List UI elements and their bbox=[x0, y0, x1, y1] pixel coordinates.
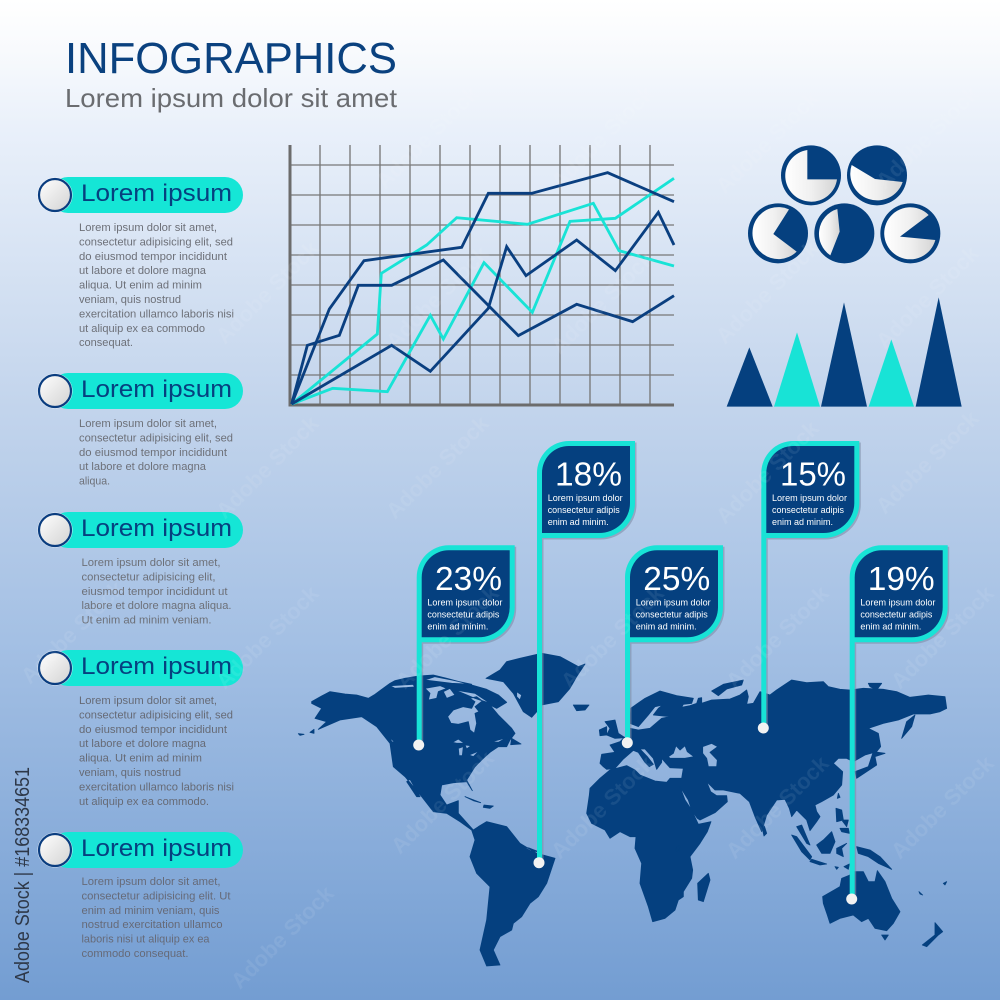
line chart bbox=[290, 145, 674, 405]
flag: 23%: 23% bbox=[435, 560, 502, 597]
watermarks: Adobe Stock bbox=[556, 580, 669, 694]
text block 2: consectetur adipisicing elit, sed bbox=[79, 432, 233, 444]
flag: 15%: 15% bbox=[780, 456, 846, 493]
text block 1: Lorem ipsum dolor sit amet, bbox=[79, 222, 217, 234]
text block 3: consectetur adipisicing elit, bbox=[82, 571, 216, 583]
watermarks: Adobe Stock bbox=[546, 750, 659, 864]
watermarks: Adobe Stock bbox=[226, 880, 339, 994]
text block 5: commodo consequat. bbox=[82, 948, 188, 960]
islands bbox=[298, 705, 589, 808]
text block 5: laboris nisi ut aliquip ex ea bbox=[82, 934, 210, 946]
text block 2: do eiusmod tempor incididunt bbox=[79, 447, 228, 459]
text block 3: labore et dolore magna aliqua. bbox=[82, 600, 232, 612]
world map bbox=[298, 653, 947, 966]
triangle chart bbox=[727, 297, 962, 407]
item 4 bbox=[38, 650, 243, 808]
text block 4: exercitation ullamco laboris nisi bbox=[79, 781, 234, 793]
pie 4 bbox=[814, 203, 874, 263]
text block 1: consectetur adipisicing elit, sed bbox=[79, 236, 233, 248]
watermarks: Adobe Stock bbox=[871, 240, 984, 354]
item 2 bbox=[38, 373, 243, 488]
watermarks: Adobe Stock bbox=[721, 750, 834, 864]
flag: 15%: enim ad minim. bbox=[772, 517, 833, 528]
text block 5: nostrud exercitation ullamco bbox=[82, 919, 222, 931]
watermarks: Adobe Stock bbox=[711, 415, 824, 529]
text block 4: consectetur adipisicing elit, sed bbox=[79, 709, 233, 721]
watermarks: Adobe Stock bbox=[16, 575, 129, 689]
afro-eurasia and oceania bbox=[587, 680, 947, 947]
flag: 18%: 18% bbox=[555, 456, 622, 493]
pill heading 2: Lorem ipsum bbox=[81, 376, 232, 403]
text block 3 bbox=[82, 557, 232, 627]
pie 1 bbox=[781, 145, 841, 205]
text block 3: eiusmod tempor incididunt ut bbox=[82, 586, 228, 598]
flag: 25%: 25% bbox=[643, 560, 710, 597]
flag: 23%: enim ad minim. bbox=[427, 621, 488, 632]
pill heading 4 bbox=[38, 650, 243, 686]
flag: 23%: consectetur adipis bbox=[427, 609, 500, 620]
watermarks: Adobe Stock bbox=[386, 745, 499, 859]
flag: 25%: consectetur adipis bbox=[636, 609, 708, 620]
flag: 15%: consectetur adipis bbox=[772, 505, 844, 516]
text block 1 bbox=[79, 222, 234, 349]
text block 4: veniam, quis nostrud bbox=[79, 767, 181, 779]
british isles bbox=[599, 720, 625, 738]
text block 1: exercitation ullamco laboris nisi bbox=[79, 308, 234, 320]
pie 3 bbox=[748, 203, 808, 263]
text block 4 bbox=[79, 695, 234, 808]
greenland bbox=[486, 653, 585, 717]
text block 5 bbox=[82, 876, 231, 960]
watermarks: Adobe Stock bbox=[211, 580, 324, 694]
text block 1: veniam, quis nostrud bbox=[79, 294, 181, 306]
stock id caption: Adobe Stock | #168334651 bbox=[12, 767, 34, 983]
pill heading 1: Lorem ipsum bbox=[81, 180, 232, 207]
pill heading 2 bbox=[38, 373, 243, 409]
item 3 bbox=[38, 512, 243, 627]
watermarks: Adobe Stock bbox=[211, 410, 324, 524]
tasmania and new zealand bbox=[882, 882, 947, 947]
flag: 18%: Lorem ipsum dolor bbox=[548, 493, 623, 504]
watermarks: Adobe Stock bbox=[391, 580, 504, 694]
text block 1: ut labore et dolore magna bbox=[79, 265, 207, 277]
flag: 23%: Lorem ipsum dolor bbox=[427, 597, 502, 608]
watermarks: Adobe Stock bbox=[871, 80, 984, 194]
pill heading 5: Lorem ipsum bbox=[81, 835, 232, 862]
text block 2: ut labore et dolore magna bbox=[79, 461, 207, 473]
flag: 18%: enim ad minim. bbox=[548, 517, 609, 528]
text block 3: Ut enim ad minim veniam. bbox=[82, 615, 212, 627]
watermarks: Adobe Stock bbox=[721, 580, 834, 694]
flag: 18%: consectetur adipis bbox=[548, 505, 620, 516]
afro-eurasia bbox=[587, 680, 947, 922]
watermarks: Adobe Stock bbox=[211, 235, 324, 349]
text block 4: Lorem ipsum dolor sit amet, bbox=[79, 695, 217, 707]
asia-pacific islands bbox=[676, 680, 915, 902]
location flags bbox=[413, 441, 949, 904]
text block 1: consequat. bbox=[79, 337, 133, 349]
subtitle: Lorem ipsum dolor sit amet bbox=[65, 83, 398, 113]
pie charts bbox=[748, 145, 940, 263]
watermarks: Adobe Stock bbox=[886, 750, 999, 864]
watermarks: Adobe Stock bbox=[546, 245, 659, 359]
watermarks: Adobe Stock bbox=[711, 235, 824, 349]
watermarks: Adobe Stock bbox=[711, 85, 824, 199]
flag: 25% bbox=[622, 545, 724, 748]
flag: 23% bbox=[413, 545, 516, 750]
text block 1: do eiusmod tempor incididunt bbox=[79, 251, 228, 263]
title block bbox=[65, 34, 398, 113]
pill heading 1 bbox=[38, 177, 243, 213]
title: INFOGRAPHICS bbox=[65, 34, 397, 83]
flag: 25%: Lorem ipsum dolor bbox=[636, 597, 711, 608]
text block 3: Lorem ipsum dolor sit amet, bbox=[82, 557, 220, 569]
flag: 19%: consectetur adipis bbox=[860, 609, 933, 620]
text block 2: Lorem ipsum dolor sit amet, bbox=[79, 418, 217, 430]
flag: 19%: enim ad minim. bbox=[860, 621, 921, 632]
text block 2: aliqua. bbox=[79, 476, 110, 488]
pill heading 3: Lorem ipsum bbox=[81, 515, 232, 542]
text block 5: Lorem ipsum dolor sit amet, bbox=[82, 876, 220, 888]
text block 5: enim ad minim veniam, quis bbox=[82, 905, 220, 917]
text block 4: do eiusmod tempor incididunt bbox=[79, 724, 228, 736]
north and south america bbox=[312, 675, 555, 966]
pie 2 bbox=[847, 145, 907, 205]
australia bbox=[823, 871, 900, 931]
text block 1: aliqua. Ut enim ad minim bbox=[79, 280, 202, 292]
text block 2 bbox=[79, 418, 233, 488]
watermarks: Adobe Stock bbox=[886, 580, 999, 694]
watermarks: Adobe Stock bbox=[546, 80, 659, 194]
pill heading 4: Lorem ipsum bbox=[81, 653, 232, 680]
flag: 15%: Lorem ipsum dolor bbox=[772, 493, 847, 504]
watermarks: Adobe Stock bbox=[871, 405, 984, 519]
watermarks: Adobe Stock bbox=[371, 80, 484, 194]
americas bbox=[298, 653, 589, 966]
watermarks: Adobe Stock bbox=[381, 240, 494, 354]
text block 5: consectetur adipisicing elit. Ut bbox=[82, 890, 231, 902]
flag: 25%: enim ad minim. bbox=[636, 621, 697, 632]
flag: 19%: 19% bbox=[868, 560, 935, 597]
pie 5 bbox=[880, 203, 940, 263]
text block 4: ut aliquip ex ea commodo. bbox=[79, 796, 209, 808]
item 5 bbox=[38, 832, 243, 960]
text block 4: ut labore et dolore magna bbox=[79, 738, 207, 750]
text block 1: ut aliquip ex ea commodo bbox=[79, 323, 205, 335]
sidebar list bbox=[38, 177, 243, 960]
item 1 bbox=[38, 177, 243, 349]
pill heading 5 bbox=[38, 832, 243, 868]
pill heading 3 bbox=[38, 512, 243, 548]
flag: 19% bbox=[846, 545, 949, 904]
text block 4: aliqua. Ut enim ad minim bbox=[79, 753, 202, 765]
flag: 19%: Lorem ipsum dolor bbox=[860, 597, 935, 608]
watermarks: Adobe Stock bbox=[381, 410, 494, 524]
flag: 18% bbox=[534, 441, 636, 868]
flag: 15% bbox=[758, 441, 861, 734]
